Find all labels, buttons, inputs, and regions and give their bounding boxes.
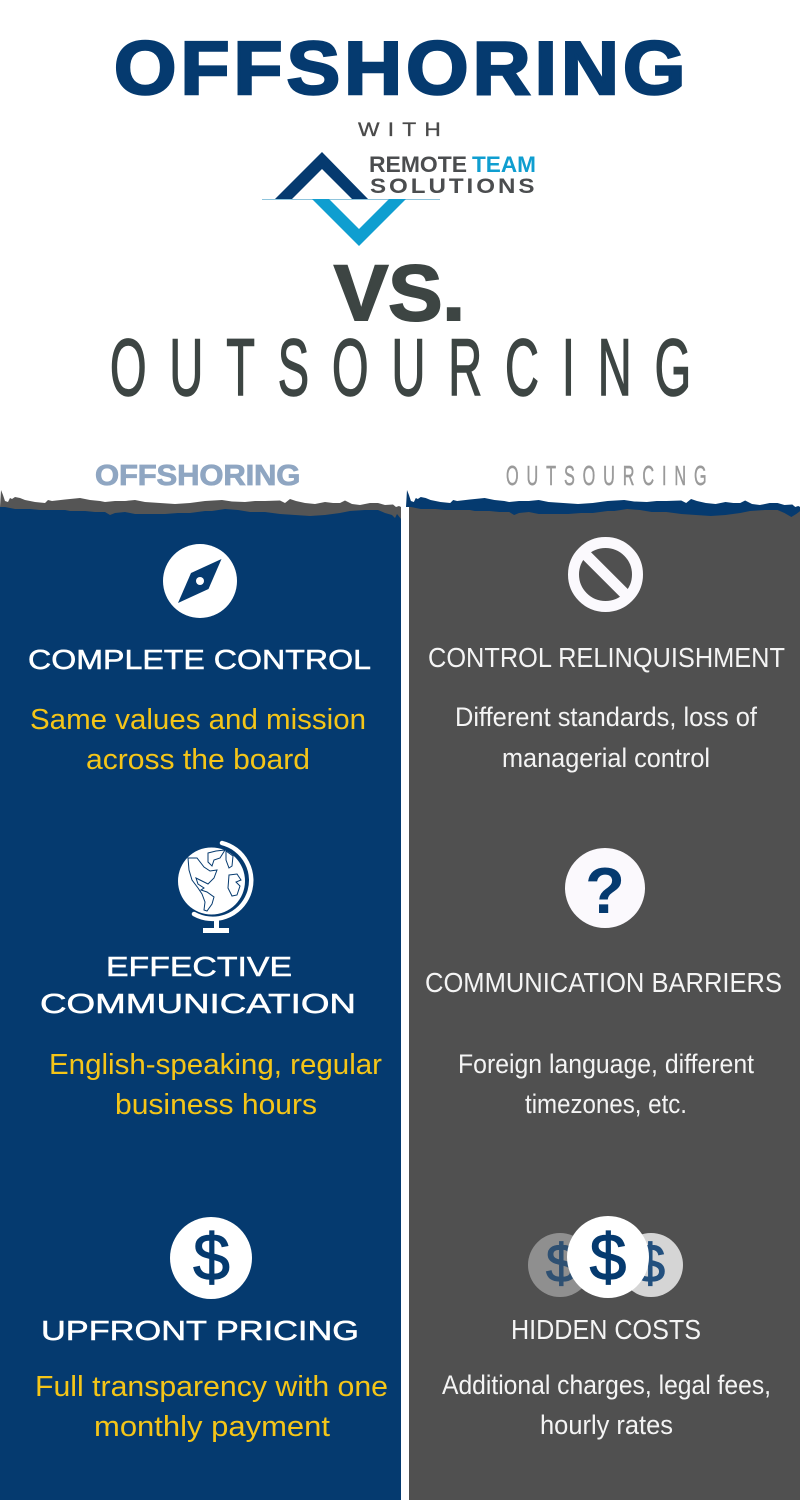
text: same values bbox=[30, 704, 366, 776]
icon: prohibited bbox=[574, 542, 638, 606]
text: same values: Same values and mission bbox=[30, 704, 366, 736]
text: additional charges bbox=[442, 1370, 771, 1440]
column heading: outsourcing: OUTSOURCING bbox=[506, 459, 707, 491]
icon: question mark: ? bbox=[585, 854, 625, 927]
text: different standards: Different standards, loss of bbox=[455, 702, 757, 732]
icon: dollar coins bbox=[528, 1216, 683, 1298]
text: english-speaking: business hours bbox=[115, 1089, 317, 1121]
header bbox=[110, 27, 691, 413]
text: foreign language bbox=[458, 1049, 754, 1119]
heading: hidden costs: HIDDEN COSTS bbox=[511, 1314, 701, 1345]
icon: dollar coins: $ bbox=[635, 1234, 665, 1294]
text: full transparency: Full transparency with one bbox=[35, 1371, 388, 1403]
icon: dollar: $ bbox=[193, 1220, 230, 1294]
with label: WITH bbox=[358, 120, 441, 141]
text: different standards bbox=[455, 702, 757, 773]
icon: dollar bbox=[170, 1217, 252, 1299]
outsourcing heading: OUTSOURCING bbox=[110, 323, 691, 413]
icon: dollar coins: $ bbox=[590, 1220, 626, 1294]
text: english-speaking bbox=[49, 1049, 382, 1121]
vs heading: VS. bbox=[334, 248, 465, 337]
text: different standards: managerial control bbox=[502, 743, 710, 773]
text: full transparency: monthly payment bbox=[94, 1411, 330, 1443]
panel: outsourcing bbox=[406, 490, 800, 1500]
text: additional charges: hourly rates bbox=[540, 1410, 673, 1440]
text: foreign language: timezones, etc. bbox=[525, 1089, 687, 1119]
text: foreign language: Foreign language, different bbox=[458, 1049, 754, 1079]
torn strip: navy bbox=[406, 490, 800, 517]
text: full transparency bbox=[35, 1371, 388, 1443]
heading: effective communication bbox=[40, 951, 356, 1019]
column heading: offshoring: OFFSHORING bbox=[95, 460, 300, 492]
torn strip: grey bbox=[0, 490, 401, 519]
icon: globe bbox=[178, 843, 251, 933]
icon: question mark bbox=[565, 848, 645, 928]
heading: complete control: COMPLETE CONTROL bbox=[28, 644, 371, 675]
panel: offshoring bbox=[0, 490, 401, 1500]
text: additional charges: Additional charges, legal fees, bbox=[442, 1370, 771, 1400]
logo: remote team solutions bbox=[262, 152, 536, 246]
icon: compass bbox=[163, 544, 237, 618]
icon: dollar coins: $ bbox=[546, 1234, 576, 1294]
logo: remote team solutions: TEAM bbox=[472, 152, 536, 177]
heading: upfront pricing: UPFRONT PRICING bbox=[41, 1315, 359, 1346]
text: same values: across the board bbox=[86, 744, 310, 776]
logo: remote team solutions: REMOTE bbox=[369, 152, 467, 177]
heading: effective communication: EFFECTIVE bbox=[106, 951, 292, 982]
text: english-speaking: English-speaking, regular bbox=[49, 1049, 382, 1081]
heading: effective communication: COMMUNICATION bbox=[40, 988, 356, 1019]
logo: remote team solutions: SOLUTIONS bbox=[370, 174, 534, 198]
title: offshoring: OFFSHORING bbox=[114, 27, 685, 110]
